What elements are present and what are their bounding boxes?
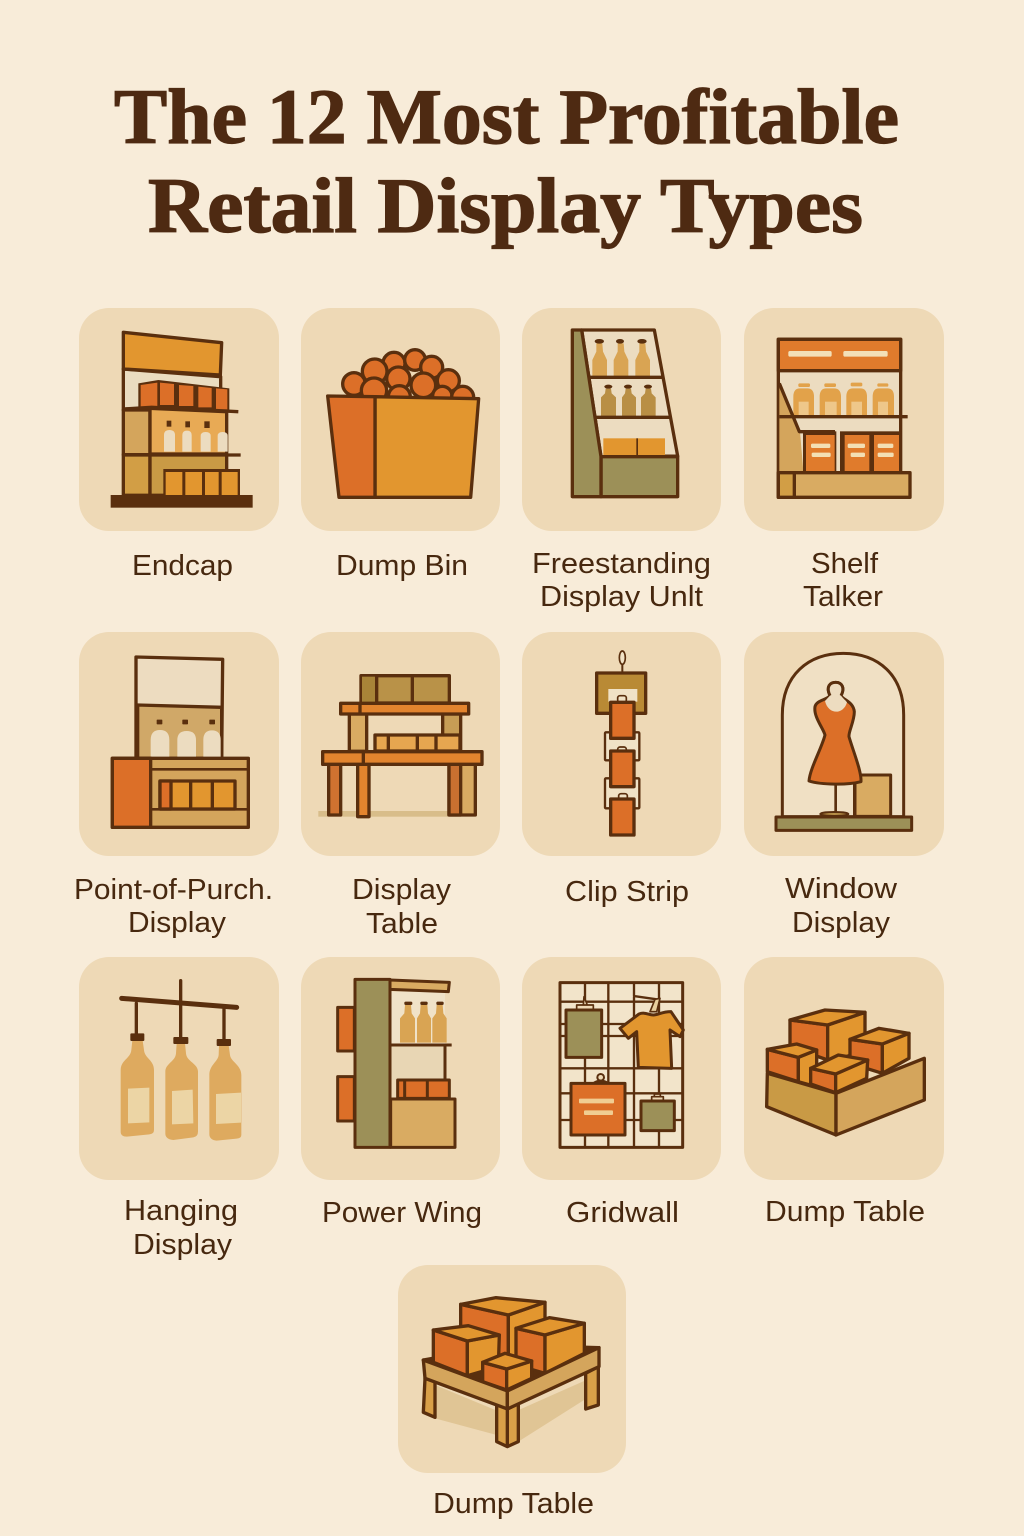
label: Freestanding Display Unlt [532, 548, 711, 613]
icon: hanging display [121, 981, 241, 1141]
panel: Dump Bin [301, 308, 500, 582]
icon: display table [318, 676, 482, 817]
label: Display Table [352, 874, 452, 940]
icon: dump table crate [767, 1010, 924, 1135]
label: Point-of-Purch. Display [74, 874, 273, 939]
label: Dump Bin: Dump Bin [336, 550, 468, 582]
panel: Display Table [301, 632, 500, 940]
label: Display Table: Display [352, 874, 452, 906]
label: Endcap: Endcap [132, 550, 233, 582]
label: Point-of-Purch. Display: Display [128, 907, 227, 939]
label: Shelf Talker [803, 548, 883, 613]
icon: gridwall [560, 983, 683, 1147]
label: Gridwall: Gridwall [566, 1197, 679, 1229]
icon: freestanding display [572, 330, 678, 497]
icon: window display [776, 653, 912, 830]
icon: power wing [338, 979, 455, 1147]
label: Freestanding Display Unlt: Display Unlt [540, 581, 703, 613]
title [114, 73, 899, 249]
icon: clip strip [597, 651, 646, 835]
label: Dump Table: Dump Table [765, 1196, 925, 1228]
label: Shelf Talker: Talker [803, 581, 883, 613]
label: Freestanding Display Unlt: Freestanding [532, 548, 711, 580]
label: Hanging Display: Display [133, 1229, 233, 1261]
label: Clip Strip: Clip Strip [565, 876, 689, 908]
panel: Power Wing [301, 957, 500, 1229]
label: Window Display [785, 873, 898, 939]
label: Hanging Display [124, 1195, 238, 1261]
label: Hanging Display: Hanging [124, 1195, 238, 1227]
icon: dump table with legs [423, 1298, 599, 1447]
label: Dump Table: Dump Table [433, 1488, 594, 1520]
panel: Hanging Display [79, 957, 279, 1261]
panel: Dump Table [744, 957, 944, 1228]
label: Power Wing: Power Wing [322, 1197, 482, 1229]
icon: shelf talker [778, 339, 910, 497]
panel: Window Display [744, 632, 944, 939]
panel: Freestanding Display Unit [522, 308, 721, 613]
icon: endcap [111, 332, 253, 508]
panel: Endcap [79, 308, 279, 582]
panel: Gridwall [522, 957, 721, 1229]
panel: Dump Table (bottom) [398, 1265, 626, 1520]
icon: point of purchase display [112, 657, 248, 827]
label: Window Display: Window [785, 873, 898, 905]
panel: Point-of-Purchase Display [74, 632, 279, 939]
panel: Shelf Talker [744, 308, 944, 613]
label: Display Table: Table [366, 908, 438, 940]
title: The 12 Most Profitable [114, 73, 899, 160]
panel: Clip Strip [522, 632, 721, 908]
label: Window Display: Display [792, 907, 891, 939]
icon: dump bin [328, 350, 479, 497]
title: Retail Display Types [148, 162, 863, 249]
label: Shelf Talker: Shelf [811, 548, 879, 580]
label: Point-of-Purch. Display: Point-of-Purch. [74, 874, 273, 906]
